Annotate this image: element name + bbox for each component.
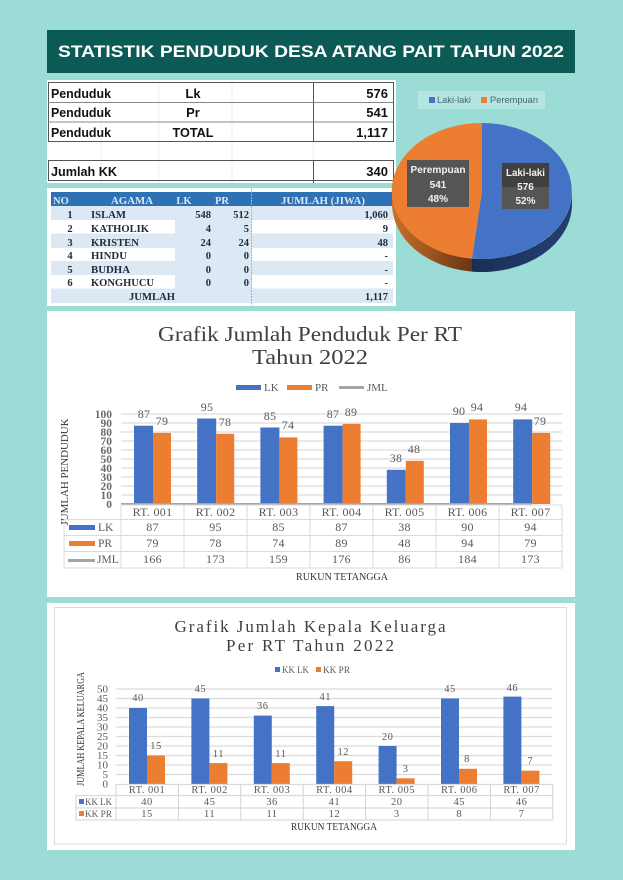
bar value labels: 11: [275, 749, 286, 760]
data table: 184: [458, 552, 477, 566]
pie legend: Laki-laki: [437, 95, 471, 106]
y axis labels: 20: [97, 740, 108, 752]
table rows: -: [384, 265, 388, 276]
data table: 74: [272, 536, 285, 550]
y axis labels: 40: [100, 463, 112, 475]
panel: religion table: [47, 188, 396, 306]
data table: 87: [146, 520, 159, 534]
y axis labels: 10: [97, 760, 108, 772]
bar value labels: [132, 683, 533, 775]
table rows: 9: [383, 224, 388, 235]
y axis title: JUMLAH KEPALA KELUARGA: [76, 671, 87, 786]
data table: RT. 003: [259, 505, 298, 519]
y axis labels: 30: [100, 472, 112, 484]
y axis labels: 10: [100, 490, 112, 502]
bar value labels: 45: [195, 684, 206, 695]
bar value labels: 90: [453, 404, 465, 418]
data table: 89: [335, 536, 348, 550]
table rows: 0: [206, 265, 211, 276]
data table: 90: [461, 520, 474, 534]
data table: 3: [394, 809, 400, 820]
chart title: [174, 617, 446, 655]
bar value labels: 87: [138, 407, 150, 421]
panel: population summary table: Penduduk: [51, 105, 112, 120]
table rows: 0: [244, 251, 249, 262]
table rows: [67, 210, 388, 303]
y axis labels: 45: [97, 693, 108, 705]
data table: 48: [398, 536, 411, 550]
data table: RT. 001: [133, 505, 172, 519]
chart title: Tahun 2022: [252, 345, 368, 369]
table rows: 0: [206, 251, 211, 262]
data table: 12: [329, 809, 340, 820]
y axis labels: 0: [106, 499, 112, 511]
y axis labels: 25: [97, 731, 108, 743]
data table: 79: [146, 536, 159, 550]
y axis labels: [95, 409, 112, 511]
data table: JML: [97, 554, 119, 566]
data table: RT. 001: [129, 785, 165, 796]
legend: KK PR: [323, 666, 351, 676]
table rows: 1,117: [365, 292, 388, 303]
x axis title: RUKUN TETANGGA: [291, 822, 378, 833]
data table: RT. 006: [441, 785, 477, 796]
panel: population summary table: 340: [366, 164, 388, 179]
table rows: ISLAM: [91, 210, 126, 221]
bar value labels: 94: [515, 400, 527, 414]
bar value labels: 87: [327, 407, 339, 421]
bar value labels: 79: [534, 414, 546, 428]
bar value labels: 12: [337, 747, 349, 758]
bar value labels: 48: [408, 442, 420, 456]
table header: AGAMA: [111, 196, 153, 207]
y axis labels: 90: [100, 418, 112, 430]
table rows: 5: [244, 224, 249, 235]
label: Laki-laki: 52%: [515, 196, 536, 207]
data table: KK LK: [85, 798, 112, 808]
data table: RT. 007: [511, 505, 550, 519]
y axis labels: 20: [100, 481, 112, 493]
table rows: 548: [195, 210, 211, 221]
table header: NO: [53, 196, 69, 207]
bar value labels: 89: [345, 405, 357, 419]
table rows: HINDU: [91, 251, 127, 262]
title banner: [47, 30, 575, 73]
panel: population summary table: 541: [366, 105, 388, 120]
label: Laki-laki: Laki-laki: [506, 168, 545, 179]
data table: 94: [461, 536, 474, 550]
table rows: 0: [244, 265, 249, 276]
data table: RT. 002: [196, 505, 235, 519]
bar value labels: 8: [464, 754, 470, 765]
data table: 173: [521, 552, 540, 566]
table rows: KONGHUCU: [91, 278, 154, 289]
y axis labels: 35: [97, 712, 108, 724]
bars PR: [153, 419, 550, 504]
table rows: 6: [67, 278, 73, 289]
legend: JML: [367, 382, 388, 394]
data table: RT. 005: [379, 785, 415, 796]
panel: population summary table: Pr: [186, 105, 200, 120]
bar value labels: [138, 400, 546, 465]
table rows: JUMLAH: [129, 292, 175, 303]
bar value labels: 20: [382, 732, 393, 743]
chart title: [158, 322, 462, 369]
panel: population summary table: TOTAL: [172, 125, 214, 140]
table rows: 0: [244, 278, 249, 289]
label: Perempuan: 48%: [428, 194, 448, 205]
chart title: Grafik Jumlah Penduduk Per RT: [158, 322, 462, 346]
bars LK: [134, 418, 532, 504]
legend: [275, 666, 351, 676]
data table: 45: [453, 797, 465, 808]
data table: 86: [398, 552, 411, 566]
y axis labels: 60: [100, 445, 112, 457]
label: Laki-laki: [502, 163, 549, 209]
y axis labels: [97, 684, 108, 790]
y axis labels: 30: [97, 722, 108, 734]
data table: 36: [266, 797, 278, 808]
data table: 87: [335, 520, 348, 534]
data table: 11: [204, 809, 215, 820]
data table: [76, 784, 553, 820]
pie legend: Perempuan: [490, 95, 538, 106]
data table: 176: [332, 552, 351, 566]
data table: RT. 005: [385, 505, 424, 519]
data table: 11: [266, 809, 278, 820]
data table: 41: [329, 797, 340, 808]
panel: population summary table: Lk: [185, 86, 201, 101]
y axis title: JUMLAH PENDUDUK: [59, 418, 71, 526]
bar value labels: 15: [150, 741, 162, 752]
data table: RT. 006: [448, 505, 487, 519]
pie legend: [418, 91, 545, 109]
data table: RT. 002: [191, 785, 228, 796]
data table: 20: [391, 797, 403, 808]
legend: PR: [315, 382, 329, 394]
bar value labels: 94: [471, 400, 483, 414]
x axis title: RUKUN TETANGGA: [296, 571, 388, 583]
panel: population summary table: Penduduk: [51, 86, 112, 101]
table rows: 1: [67, 210, 73, 221]
table header: [51, 192, 393, 207]
data table: 159: [269, 552, 288, 566]
y axis labels: 15: [97, 750, 108, 762]
bars KK PR: [147, 756, 539, 784]
table rows: 4: [206, 224, 212, 235]
data table: 95: [209, 520, 222, 534]
panel: population summary table: [47, 80, 396, 183]
legend: [236, 382, 388, 394]
bar value labels: 40: [132, 693, 144, 704]
data table: 173: [206, 552, 225, 566]
y axis labels: 40: [97, 702, 108, 714]
data table: RT. 003: [254, 785, 290, 796]
table rows: KRISTEN: [91, 238, 139, 249]
bar value labels: 79: [156, 414, 168, 428]
bar value labels: 41: [319, 692, 331, 703]
table rows: 4: [67, 251, 73, 262]
chart title: Per RT Tahun 2022: [226, 636, 394, 655]
y axis labels: 0: [102, 778, 108, 790]
bar value labels: 38: [390, 451, 402, 465]
title banner: STATISTIK PENDUDUK DESA ATANG PAIT TAHUN 2022: [58, 42, 564, 61]
table rows: KATHOLIK: [91, 224, 150, 235]
data table: 45: [204, 797, 215, 808]
bar value labels: 85: [264, 409, 276, 423]
bar value labels: 36: [257, 701, 269, 712]
panel: population summary table: Penduduk: [51, 125, 112, 140]
data table: 40: [141, 797, 153, 808]
y axis labels: 70: [100, 436, 112, 448]
data table: 78: [209, 536, 222, 550]
table rows: 24: [238, 238, 250, 249]
table header: LK: [176, 196, 192, 207]
y axis labels: 50: [97, 684, 108, 696]
table header: PR: [215, 196, 229, 207]
bar value labels: 95: [201, 400, 213, 414]
label: Perempuan: 541: [430, 180, 447, 191]
bar value labels: 74: [282, 418, 294, 432]
data table: 85: [272, 520, 285, 534]
table rows: 0: [206, 278, 211, 289]
panel: population summary table: 1,117: [356, 125, 388, 140]
label: Perempuan: Perempuan: [410, 165, 466, 176]
panel: household heads per RT chart: [47, 603, 575, 850]
panel: population summary table: Jumlah KK: [51, 164, 118, 179]
y axis labels: 50: [100, 454, 112, 466]
table rows: 2: [67, 224, 73, 235]
table rows: 24: [200, 238, 212, 249]
data table: 79: [524, 536, 537, 550]
data table: 38: [398, 520, 411, 534]
bar value labels: 78: [219, 415, 231, 429]
data table: [64, 505, 562, 568]
data table: 15: [141, 809, 153, 820]
data table: RT. 004: [316, 785, 353, 796]
y axis labels: 100: [95, 409, 112, 421]
legend: LK: [264, 382, 279, 394]
data table: KK PR: [85, 810, 113, 820]
bar value labels: 45: [444, 684, 456, 695]
legend: KK LK: [282, 666, 309, 676]
chart title: Grafik Jumlah Kepala Keluarga: [174, 617, 446, 636]
panel: population per RT chart: [47, 311, 575, 597]
label: Laki-laki: 576: [517, 182, 534, 193]
bars KK LK: [129, 697, 521, 784]
bar value labels: 11: [213, 749, 224, 760]
bar value labels: 3: [403, 764, 408, 775]
table rows: 512: [233, 210, 249, 221]
y axis labels: 80: [100, 427, 112, 439]
y axis labels: 5: [102, 769, 108, 781]
data table: PR: [98, 538, 112, 550]
data table: RT. 007: [503, 785, 540, 796]
data table: 46: [516, 797, 527, 808]
data table: RT. 004: [322, 505, 361, 519]
table rows: 5: [67, 265, 73, 276]
panel: population summary table: 576: [366, 86, 388, 101]
data table: 8: [456, 809, 462, 820]
table rows: 48: [378, 238, 388, 249]
bar value labels: 46: [507, 683, 518, 694]
table rows: -: [384, 251, 388, 262]
table header: JUMLAH (JIWA): [281, 196, 366, 207]
table rows: 1,060: [364, 210, 388, 221]
label: Perempuan: [407, 160, 469, 207]
data table: 7: [519, 809, 524, 820]
data table: LK: [98, 522, 114, 534]
bar value labels: 7: [528, 756, 533, 767]
table rows: -: [384, 278, 388, 289]
table rows: BUDHA: [91, 265, 130, 276]
data table: 94: [524, 520, 537, 534]
pie chart: gender share: [392, 91, 572, 272]
data table: 166: [143, 552, 162, 566]
table rows: 3: [67, 238, 73, 249]
